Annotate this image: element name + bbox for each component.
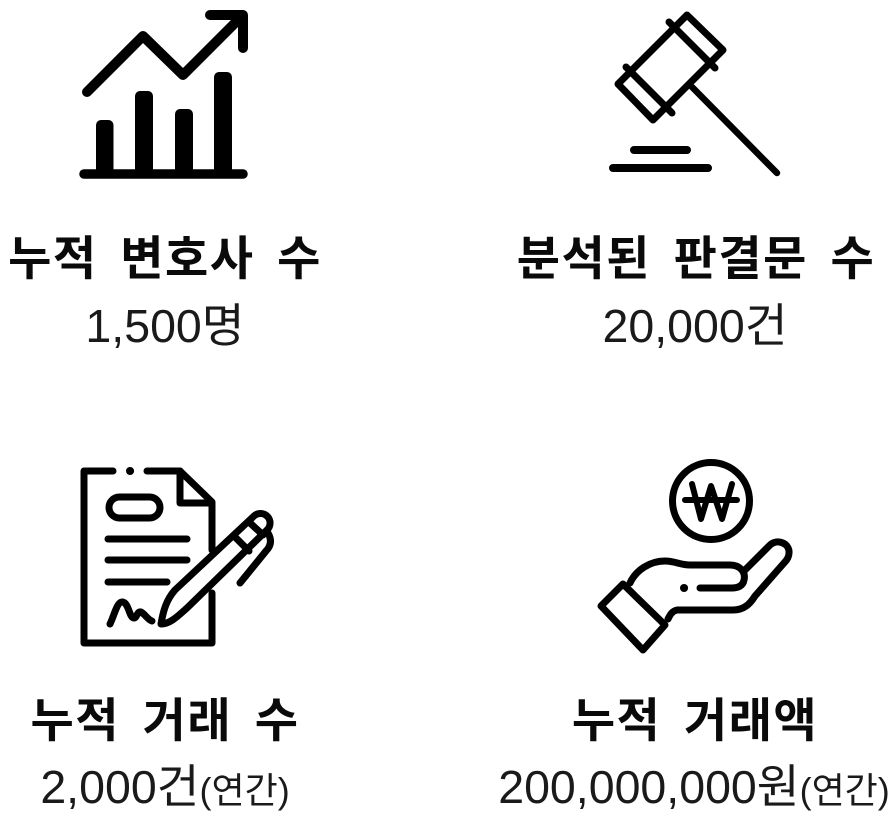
panel: analysed judgments	[517, 15, 875, 352]
value: 20,000: 20,000건	[602, 300, 788, 352]
panel: cumulative transactions	[30, 471, 300, 813]
value: 200,000,000 annual: 200,000,000원(연간)	[498, 761, 890, 813]
panel: cumulative transaction amount	[498, 462, 890, 813]
icon: rising bar chart	[84, 15, 243, 174]
icon: hand holding won coin	[601, 462, 789, 650]
value: 2,000 annual: 2,000건(연간)	[40, 761, 290, 813]
value: 1,500: 1,500명	[85, 300, 245, 352]
heading: analysed judgments: 분석된 판결문 수	[517, 220, 875, 289]
panel: cumulative lawyers	[8, 15, 322, 352]
icon: contract and pen	[84, 471, 270, 643]
icon: judge gavel	[613, 15, 777, 173]
heading: cumulative lawyers: 누적 변호사 수	[8, 220, 322, 289]
heading: cumulative transaction amount: 누적 거래액	[572, 682, 818, 751]
heading: cumulative transactions: 누적 거래 수	[30, 682, 300, 751]
